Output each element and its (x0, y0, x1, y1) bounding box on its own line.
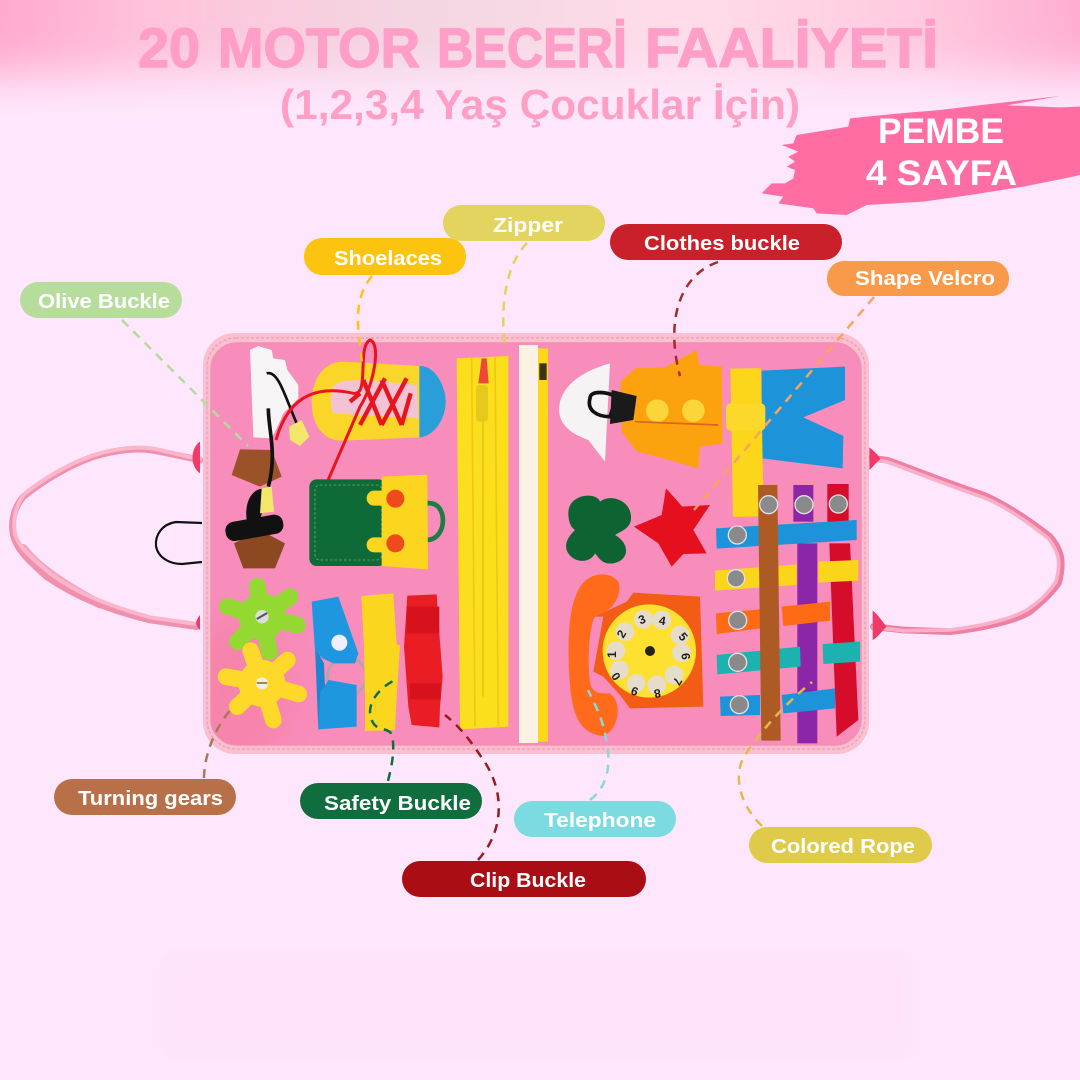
label: shape velcro: Shape Velcro (855, 268, 995, 290)
right page objects, drawn in crop coordinates (538, 348, 860, 743)
clothes buckle (559, 350, 723, 468)
label: turning gears: Turning gears (78, 788, 223, 810)
telephone: 9 (629, 683, 640, 699)
label: clothes buckle (610, 224, 842, 260)
label: clip buckle (402, 861, 646, 897)
telephone: 4 (658, 613, 667, 628)
label: zipper (443, 205, 605, 241)
label: colored rope: Colored Rope (771, 836, 915, 858)
title: BECERİ (437, 16, 627, 79)
line: turning gears (204, 707, 233, 778)
telephone: 0 (608, 669, 624, 683)
telephone: 2 (614, 627, 629, 640)
label: turning gears (54, 779, 236, 815)
badge: brush stroke with page count: 4 SAYFA (866, 154, 1017, 193)
label: shape velcro (827, 261, 1009, 296)
label: clothes buckle: Clothes buckle (644, 233, 800, 255)
badge: brush stroke with page count: PEMBE (878, 112, 1004, 151)
line: safety buckle (370, 681, 393, 781)
label: shoelaces: Shoelaces (334, 248, 442, 270)
green pocket (309, 475, 443, 569)
badge: brush stroke with page count (762, 96, 1080, 215)
turning gears (226, 586, 299, 720)
colored rope straps (715, 484, 860, 743)
line: shape velcro (694, 297, 874, 510)
line: telephone (588, 690, 608, 800)
title: 20 (138, 16, 200, 79)
label: olive buckle: Olive Buckle (38, 291, 170, 313)
telephone: 7 (670, 675, 685, 688)
right zipper (538, 348, 548, 742)
title: FAALİYETİ (645, 16, 938, 79)
label: colored rope (749, 827, 932, 863)
label: shoelaces (304, 238, 466, 275)
left zipper (457, 356, 508, 729)
line: olive buckle (122, 320, 248, 446)
line: zipper (503, 243, 527, 345)
line: colored rope (739, 682, 812, 826)
line: clip buckle (445, 715, 499, 860)
line: clothes buckle (674, 262, 718, 376)
left page objects, drawn in crop coordinates (224, 340, 508, 731)
label: clip buckle: Clip Buckle (470, 870, 586, 892)
label: telephone (514, 801, 676, 837)
label: zipper: Zipper (493, 215, 563, 237)
olive buckle (224, 346, 309, 568)
label: safety buckle: Safety Buckle (324, 793, 471, 815)
subtitle: (1,2,3,4 Yaş Çocuklar İçin) (280, 81, 800, 128)
clover shape (566, 496, 631, 564)
line: shoelaces (358, 276, 372, 362)
safety buckle straps (312, 593, 443, 731)
telephone (569, 574, 703, 736)
label: safety buckle (300, 783, 482, 819)
telephone: 8 (653, 686, 662, 701)
leader lines (122, 243, 874, 860)
telephone: 5 (676, 630, 691, 644)
telephone: 3 (636, 612, 648, 627)
shape velcro strap (726, 367, 845, 517)
shoelaces (276, 340, 446, 483)
label: olive buckle (20, 282, 182, 318)
title: MOTOR (218, 16, 420, 79)
telephone: 6 (678, 652, 693, 661)
handle loop (156, 522, 202, 564)
star shape (634, 488, 710, 567)
label: telephone: Telephone (544, 810, 656, 832)
board (190, 333, 869, 760)
telephone: 1 (605, 651, 619, 658)
left handle (12, 442, 200, 630)
right handle (869, 447, 1061, 640)
